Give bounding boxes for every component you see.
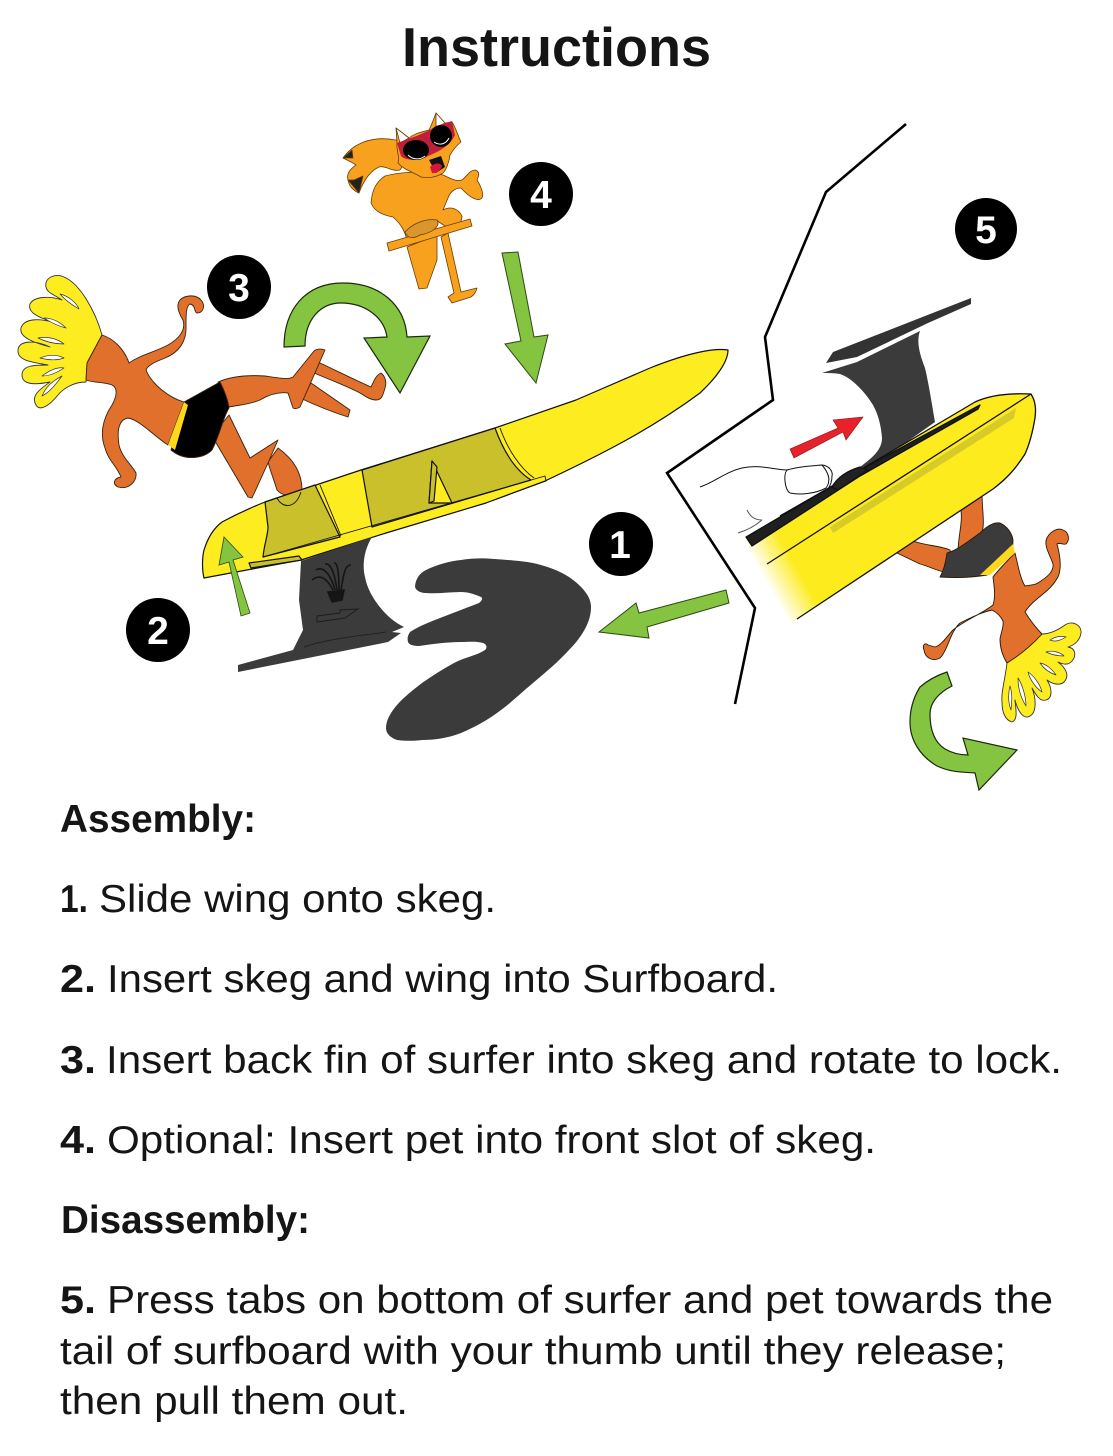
step badge 1: 1 <box>609 524 631 567</box>
removal detail: cut-away surfboard <box>745 394 1036 625</box>
wing <box>386 558 591 741</box>
back leg and foot <box>300 362 386 417</box>
heading: disassembly: Disassembly: <box>61 1199 310 1242</box>
break line between panels <box>667 124 906 704</box>
upper front leg <box>218 349 325 409</box>
step 1 text: Slide wing onto skeg. <box>99 878 496 921</box>
skeg <box>238 537 404 672</box>
step 5 text: tail of surfboard with your thumb until they release; <box>60 1330 1006 1373</box>
removal detail: surfer underneath board <box>897 493 1081 722</box>
crest mark <box>312 563 358 622</box>
step badge 3: 3 <box>228 267 250 310</box>
step 4 text: Optional: Insert pet into front slot of skeg. <box>107 1119 876 1162</box>
step badge 5: 5 <box>975 209 997 252</box>
title: Instructions <box>402 16 711 78</box>
pet cat figure <box>343 113 483 303</box>
step 4 text: 4. <box>60 1119 96 1162</box>
step 5 text: then pull them out. <box>60 1380 408 1423</box>
step 3 text: 3. <box>60 1039 96 1082</box>
step 2 text: Insert skeg and wing into Surfboard. <box>107 958 778 1001</box>
step 5 text <box>60 1279 1053 1423</box>
step badge 1 <box>589 512 653 576</box>
hair fan <box>18 276 102 408</box>
removal detail: skeg <box>822 298 971 468</box>
main surfboard <box>202 350 728 578</box>
step badge 2: 2 <box>147 610 169 653</box>
step badge 2 <box>126 598 190 662</box>
step badge 5 <box>955 198 1017 260</box>
lower leg curving into the board <box>268 448 302 495</box>
step badge 3 <box>207 255 271 319</box>
surfer figure, left <box>18 276 386 498</box>
arrow: red push direction <box>790 417 863 458</box>
step 2 text: 2. <box>60 958 96 1001</box>
arrow: step 4 <box>502 252 548 383</box>
arrow: step 3 rotate <box>284 283 430 393</box>
step badge 4: 4 <box>530 174 552 217</box>
step badge 4 <box>509 162 573 226</box>
arrow: step 2 <box>219 537 250 616</box>
step 1 text: 1. <box>60 878 88 921</box>
arrow: step 5 rotate <box>910 672 1017 790</box>
thumb <box>700 465 832 533</box>
torso, arms and head <box>86 296 204 488</box>
hair fan <box>1002 623 1081 722</box>
step 5 text: 5. <box>60 1279 96 1322</box>
arrow: step 1 <box>599 590 729 638</box>
step 5 text: Press tabs on bottom of surfer and pet towards the <box>107 1279 1053 1322</box>
shorts <box>171 382 229 458</box>
heading: assembly: Assembly: <box>60 798 256 841</box>
illustration: exploded assembly diagram <box>18 113 1081 790</box>
step 3 text: Insert back fin of surfer into skeg and rotate to lock. <box>106 1039 1062 1082</box>
